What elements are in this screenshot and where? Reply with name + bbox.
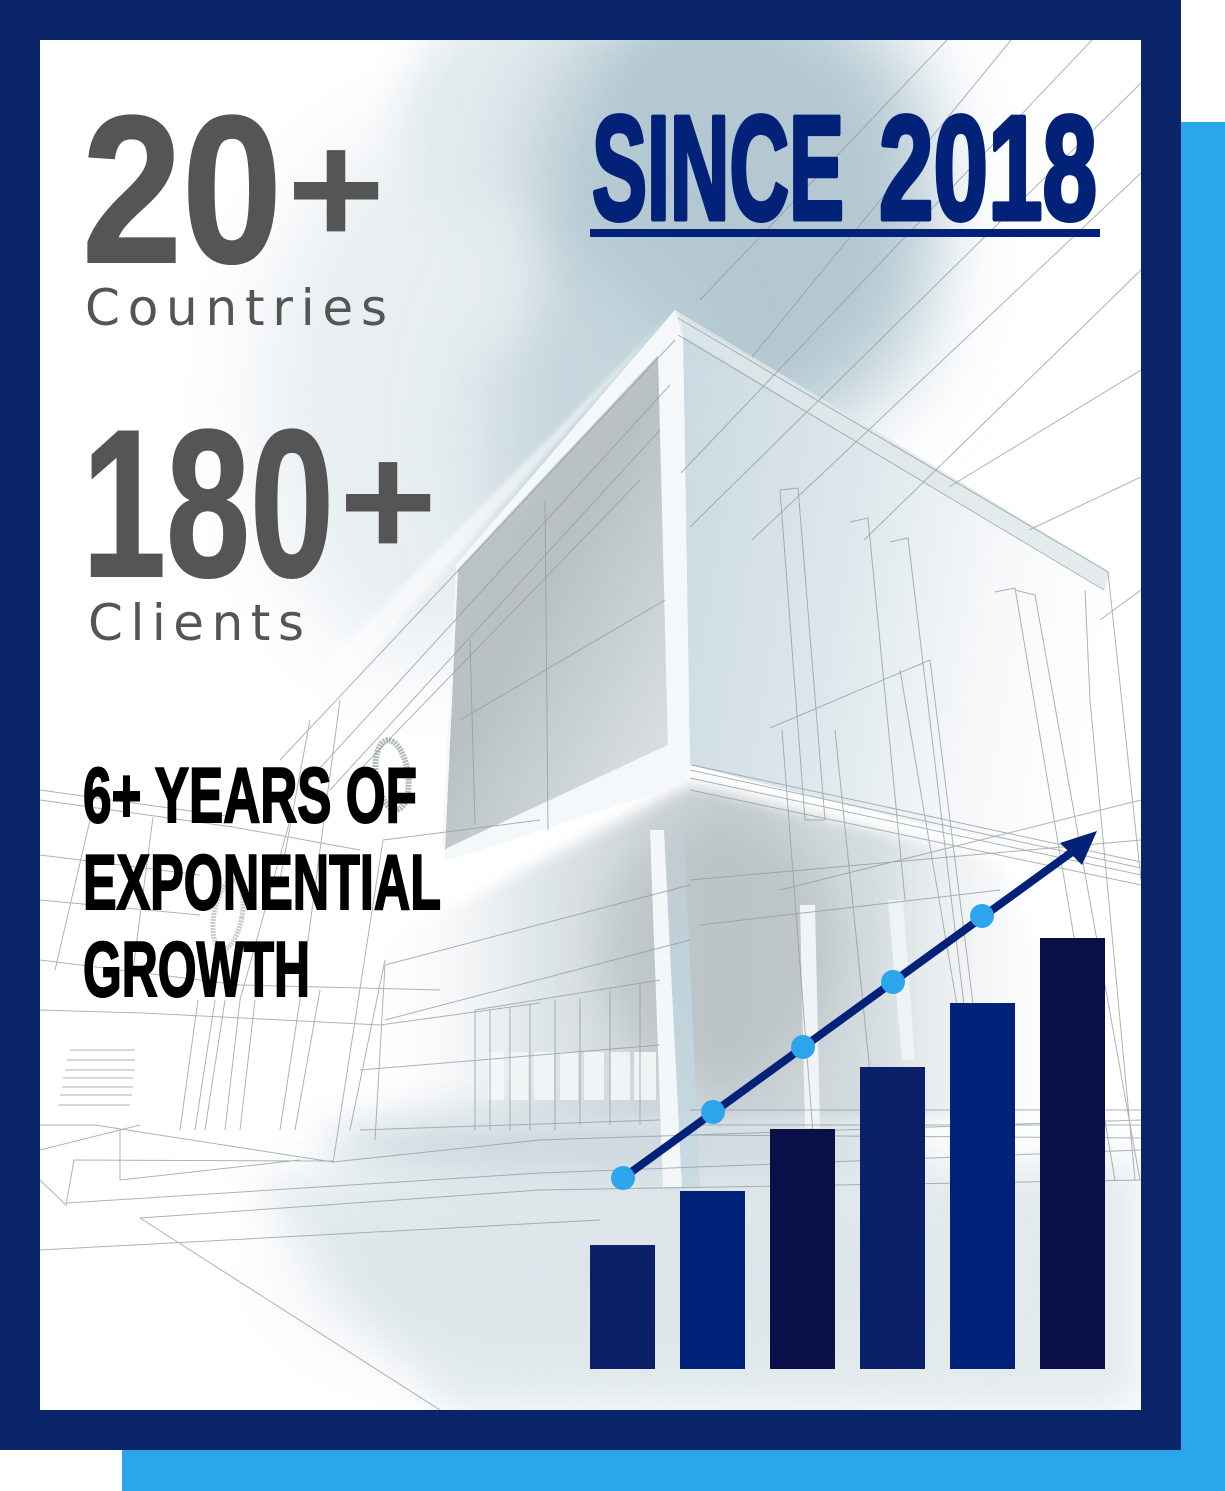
- text block: growth statement: [83, 751, 441, 1013]
- ornamental arch: [371, 738, 413, 812]
- bar chart: [590, 938, 1105, 1369]
- plus sign: +: [287, 99, 385, 278]
- building side wall: [683, 336, 1016, 834]
- text block: growth statement: 6+ YEARS OF: [83, 751, 417, 839]
- lower storey: [445, 780, 999, 1123]
- window panel: [445, 355, 668, 850]
- columns and glazing: [650, 830, 682, 1187]
- text block: growth statement: GROWTH: [83, 925, 310, 1013]
- stat: 20+ Countries: [82, 72, 387, 337]
- arrow: growth trend line: [611, 831, 1097, 1190]
- plus sign: +: [339, 411, 437, 590]
- number 20+: 20: [82, 72, 282, 307]
- heading: since 2018: 2018: [879, 86, 1097, 251]
- underline: [590, 229, 1100, 237]
- heading: since 2018: SINCE: [592, 86, 844, 251]
- white building frame: [442, 310, 690, 862]
- label Clients: Clients: [88, 594, 304, 652]
- label Countries: Countries: [85, 279, 387, 337]
- number 180+: 180: [82, 386, 334, 621]
- text block: growth statement: EXPONENTIAL: [83, 838, 441, 926]
- stat: 180+ Clients: [82, 386, 437, 652]
- ground plane: [250, 1160, 1141, 1410]
- sky and clouds: [248, 40, 981, 676]
